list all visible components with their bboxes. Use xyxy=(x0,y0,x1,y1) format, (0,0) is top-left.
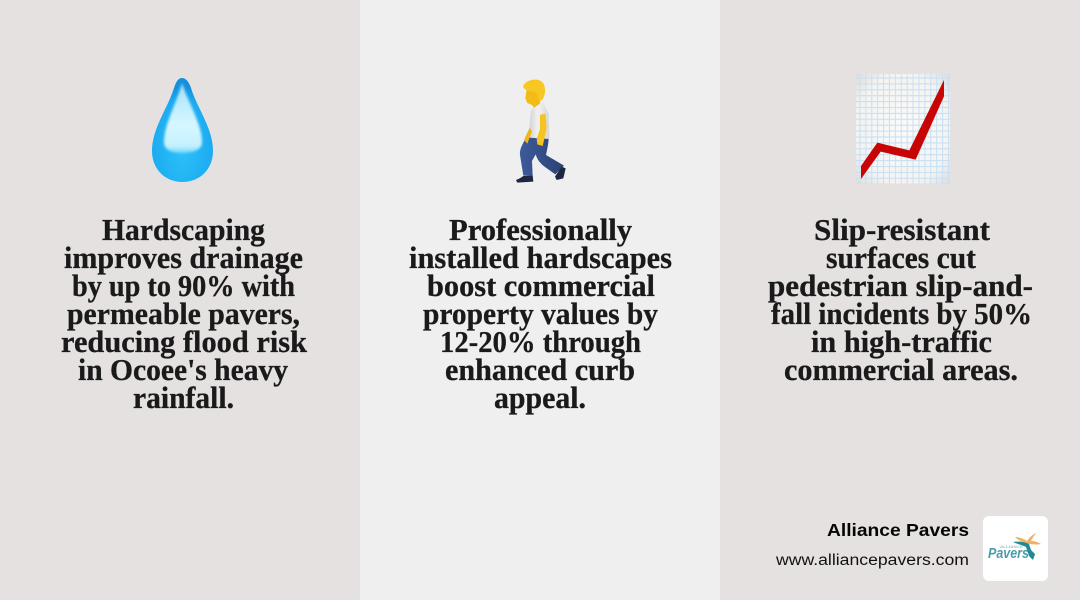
icon: water drop xyxy=(152,78,213,182)
text: drainage statistic: Hardscaping xyxy=(102,213,265,247)
text: drainage statistic: in Ocoee's heavy xyxy=(78,353,288,387)
text: property value statistic xyxy=(409,213,672,415)
text: property value statistic: property values by xyxy=(423,297,658,331)
text: property value statistic: appeal. xyxy=(494,381,586,415)
panel: safety xyxy=(720,0,1080,600)
text: safety statistic: Slip-resistant xyxy=(814,213,991,247)
panel: drainage xyxy=(0,0,360,600)
text: drainage statistic: improves drainage xyxy=(64,241,303,275)
text: safety statistic xyxy=(768,213,1033,387)
text: safety statistic: pedestrian slip-and- xyxy=(768,269,1033,303)
text: drainage statistic: rainfall. xyxy=(133,381,234,415)
panel: property value xyxy=(360,0,720,600)
text: drainage statistic: by up to 90% with xyxy=(72,269,295,303)
icon: chart increasing xyxy=(856,74,950,184)
footer: company name and website xyxy=(775,520,969,569)
text: property value statistic: installed hardscapes xyxy=(409,241,672,275)
text: drainage statistic xyxy=(61,213,308,415)
icon: person walking xyxy=(516,80,566,183)
text: safety statistic: in high-traffic xyxy=(811,325,992,359)
footer: company name and website: Alliance Pavers xyxy=(827,520,969,540)
text: safety statistic: surfaces cut xyxy=(826,241,977,275)
text: property value statistic: Professionally xyxy=(449,213,632,247)
text: property value statistic: 12-20% through xyxy=(440,325,641,359)
text: safety statistic: commercial areas. xyxy=(784,353,1018,387)
logo: Alliance Pavers: Pavers xyxy=(988,545,1029,562)
legs xyxy=(520,137,564,176)
logo: Alliance Pavers xyxy=(983,516,1048,581)
logo: Alliance Pavers: ALLIANCE xyxy=(1000,544,1023,549)
text: property value statistic: boost commercial xyxy=(427,269,655,303)
text: drainage statistic: reducing flood risk xyxy=(61,325,307,359)
text: property value statistic: enhanced curb xyxy=(445,353,635,387)
text: safety statistic: fall incidents by 50% xyxy=(771,297,1032,331)
footer: company name and website: www.alliancepavers.com xyxy=(775,552,969,569)
text: drainage statistic: permeable pavers, xyxy=(67,297,300,331)
